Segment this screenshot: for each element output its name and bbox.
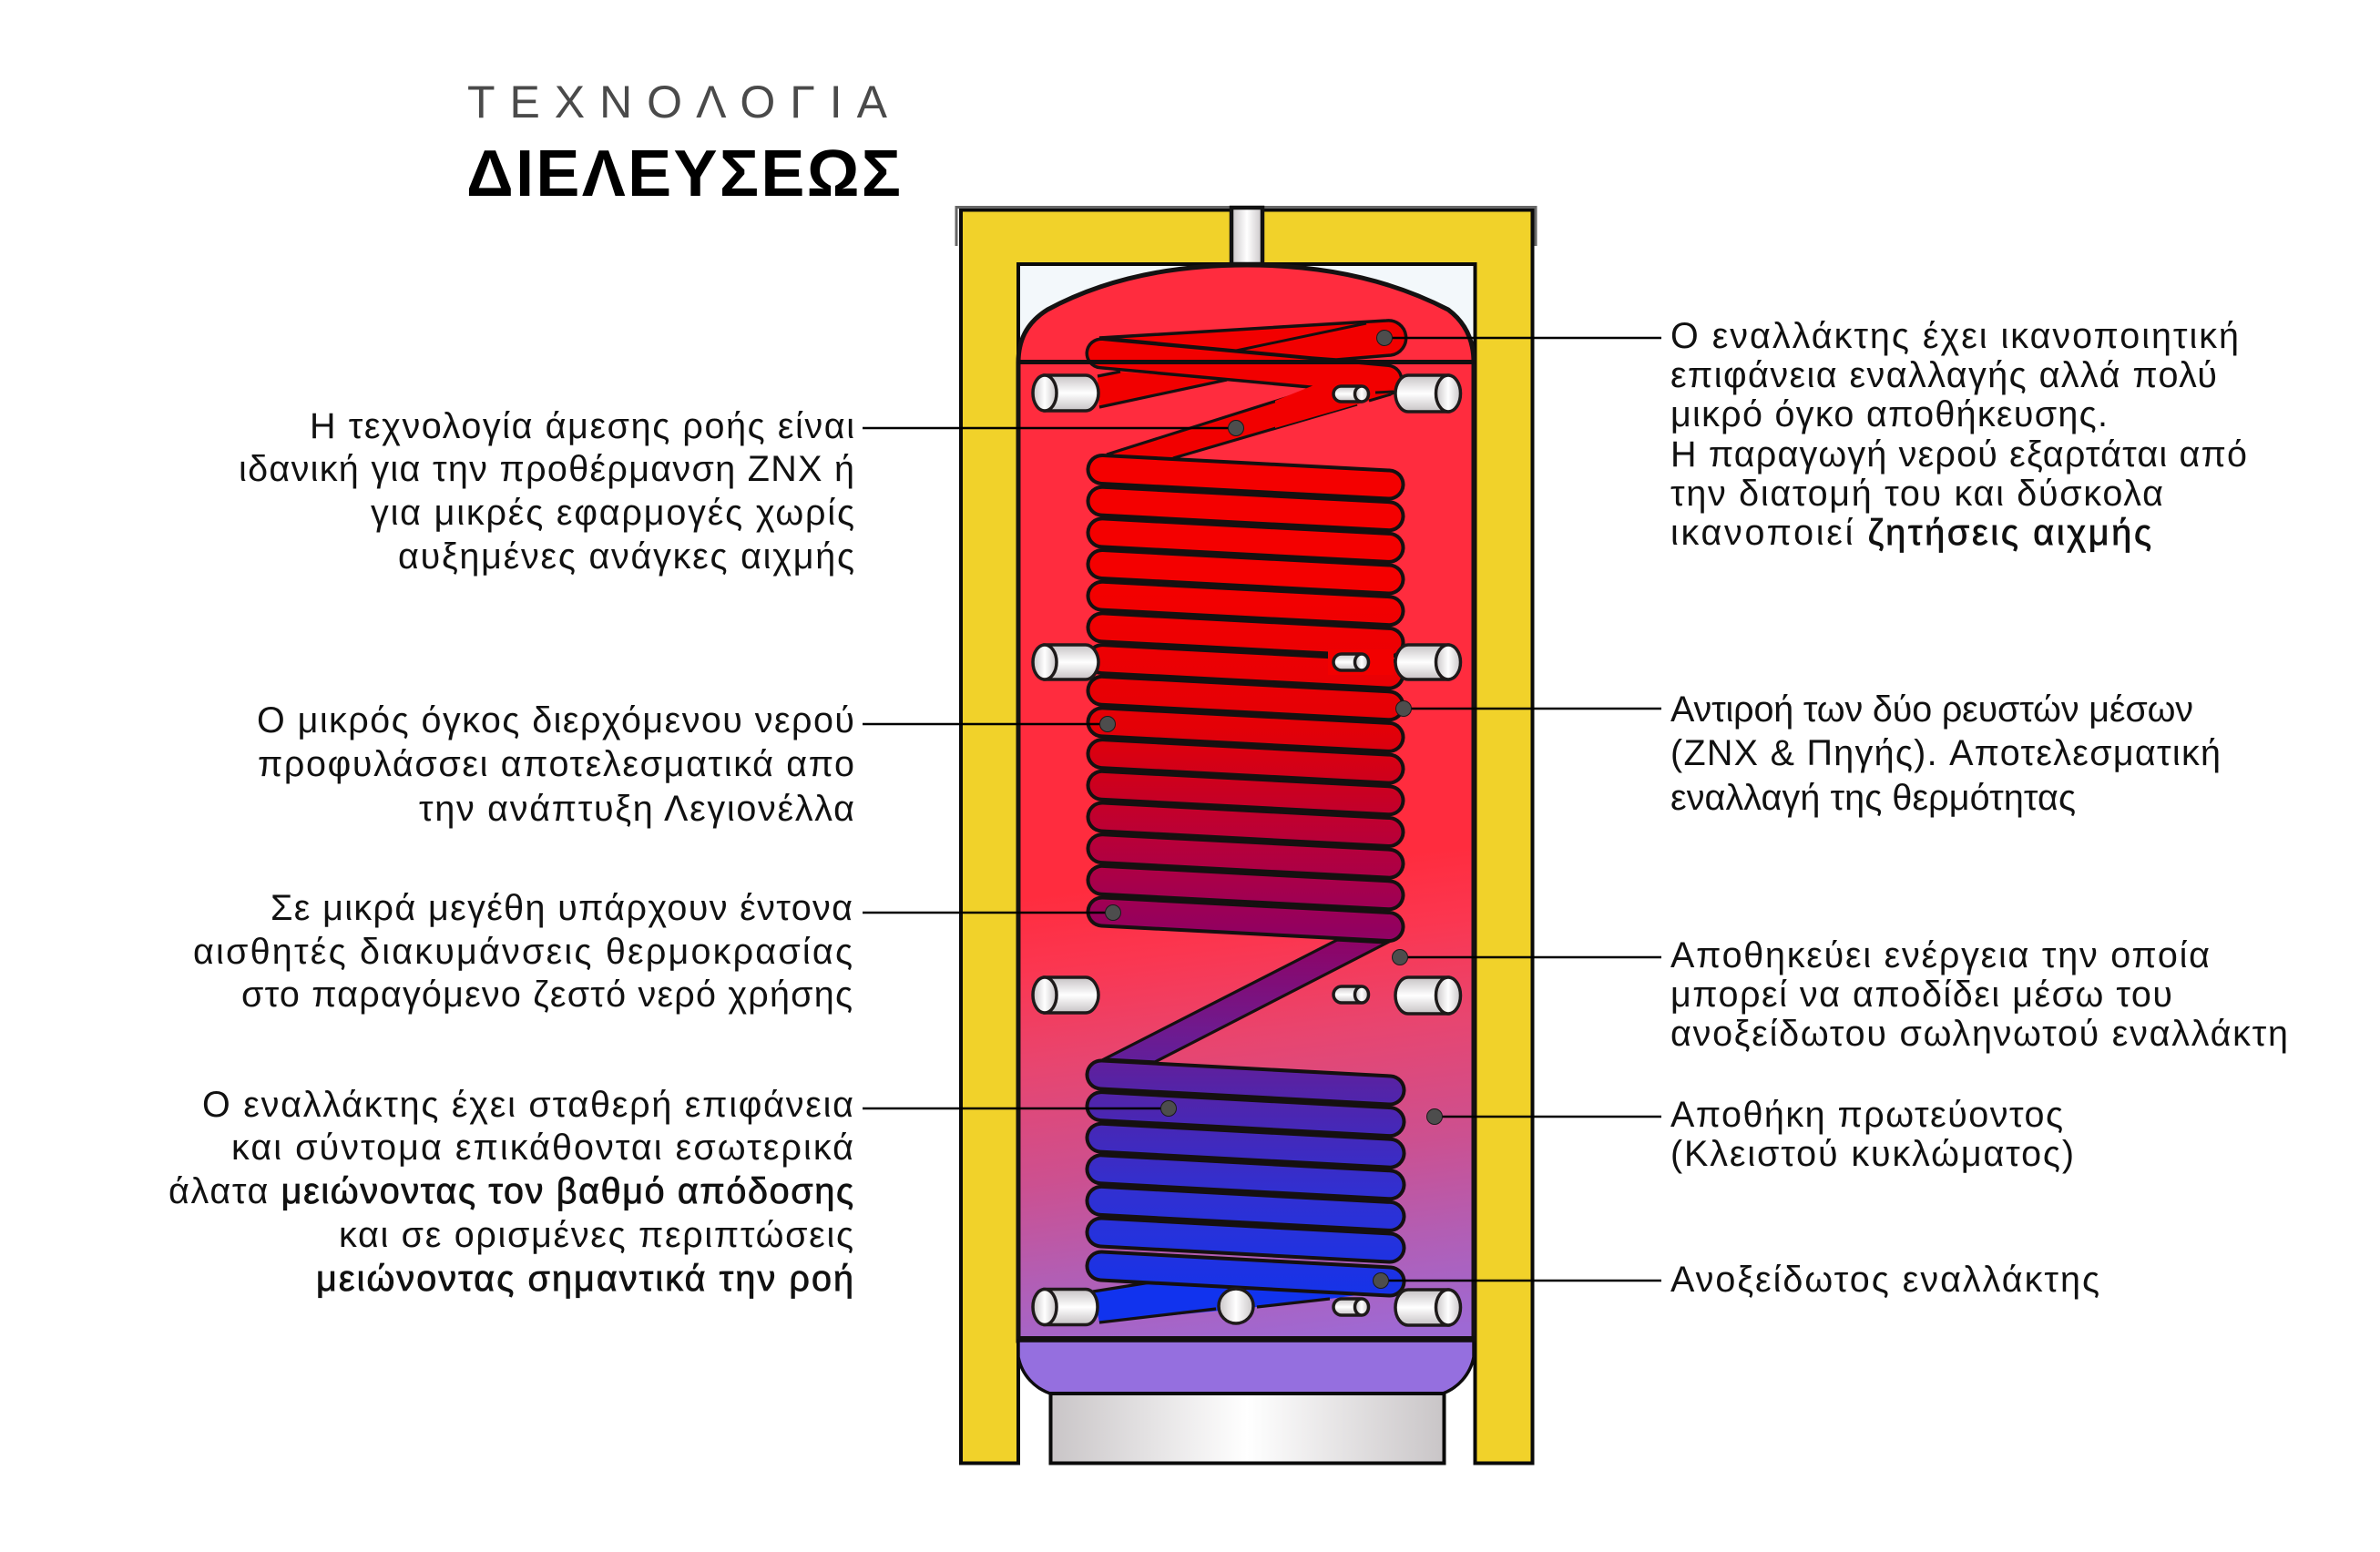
upper tank divider — [1018, 360, 1476, 364]
callout: legionella protection: προφυλάσσει αποτελεσματικά απο — [258, 744, 854, 784]
callout: primary storage: (Κλειστού κυκλώματος) — [1670, 1134, 2074, 1174]
callout: counter-flow: εναλλαγή της θερμότητας — [1670, 778, 2076, 818]
callout: counter-flow: Αντιροή των δύο ρευστών μέσων — [1670, 689, 2193, 730]
callout: energy storage: Αποθηκεύει ενέργεια την οποία — [1670, 935, 2210, 975]
small sensor fittings — [1333, 386, 1368, 1315]
top coil front turn — [1101, 353, 1387, 380]
callout: primary storage: Αποθήκη πρωτεύοντος — [1670, 1095, 2063, 1135]
inlet pipe outlines — [1093, 1282, 1330, 1322]
callout: fixed surface scaling: Ο εναλλάκτης έχει σταθερή επιφάνεια — [202, 1085, 853, 1125]
callout: temperature fluctuations: Σε μικρά μεγέθη υπάρχουν έντονα — [271, 888, 853, 928]
lower diagonal connector — [1104, 940, 1387, 1062]
callout: exchanger surface and peak demand: την διατομή του και δύσκολα — [1670, 474, 2163, 514]
tank body — [1018, 265, 1474, 1341]
right connection cylinders — [1395, 375, 1461, 1325]
bottom inlet valve — [1219, 1289, 1253, 1323]
callout: legionella protection — [257, 700, 1115, 829]
callout: temperature fluctuations: αισθητές διακυμάνσεις θερμοκρασίας — [193, 932, 853, 972]
callout: stainless exchanger — [1374, 1260, 2099, 1300]
callout: energy storage — [1392, 935, 2288, 1054]
callout: fixed surface scaling — [169, 1085, 1177, 1299]
callout: stainless exchanger: Ανοξείδωτος εναλλάκτης — [1670, 1260, 2099, 1300]
upper diagonal riser — [1107, 389, 1394, 458]
bottom inlet pipe — [1093, 1282, 1357, 1322]
lower heat exchanger coil — [1101, 1075, 1390, 1281]
callout: direct flow technology: ιδανική για την προθέρμανση ΖΝΧ ή — [239, 449, 854, 489]
riser joint lines — [1369, 392, 1394, 401]
callout: fixed surface scaling: μειώνοντας σημαντικά την ροή — [316, 1259, 853, 1299]
top coil back section — [1099, 321, 1406, 360]
upper heat exchanger coil — [1102, 470, 1389, 927]
callout: exchanger surface and peak demand: Ο εναλλάκτης έχει ικανοποιητική — [1670, 316, 2239, 356]
air gap under dome — [1020, 266, 1472, 361]
callout: exchanger surface and peak demand: μικρό όγκο αποθήκευσης. — [1670, 394, 2108, 434]
callout: exchanger surface and peak demand: επιφάνεια εναλλαγής αλλά πολύ — [1670, 355, 2217, 395]
tank bottom section — [1018, 1341, 1474, 1394]
callout: exchanger surface and peak demand — [1377, 316, 2247, 553]
boiler cross-section diagram — [956, 208, 1536, 1463]
tank lower divider — [1018, 1336, 1476, 1341]
insulation jacket — [961, 209, 1532, 1463]
base plinth — [1051, 1394, 1445, 1463]
callout: direct flow technology: Η τεχνολογία άμεσης ροής είναι — [310, 406, 854, 446]
callout: primary storage — [1426, 1095, 2074, 1174]
callout: fixed surface scaling: και σε ορισμένες περιπτώσεις — [339, 1215, 853, 1255]
callout: temperature fluctuations — [193, 888, 1120, 1015]
title — [466, 77, 901, 210]
callout: counter-flow — [1395, 689, 2221, 818]
top coil inner crossing line — [1236, 323, 1366, 351]
callout: legionella protection: Ο μικρός όγκος διερχόμενου νερού — [257, 700, 854, 740]
top cap outline — [956, 208, 1536, 246]
title: ΤΕΧΝΟΛΟΓΙΑ — [467, 77, 888, 128]
title: ΔΙΕΛΕΥΣΕΩΣ — [466, 138, 901, 210]
top outlet pipe — [1231, 208, 1262, 264]
left connection cylinders — [1033, 375, 1098, 1324]
lower-left wedge of top coil — [1098, 372, 1227, 407]
callout: exchanger surface and peak demand: ικανοποιεί ζητήσεις αιχμής — [1670, 513, 2151, 553]
callout: energy storage: ανοξείδωτου σωληνωτού εναλλάκτη — [1670, 1014, 2288, 1054]
callout: temperature fluctuations: στο παραγόμενο ζεστό νερό χρήσης — [241, 975, 853, 1015]
callout: legionella protection: την ανάπτυξη Λεγιονέλλα — [419, 789, 854, 829]
callout: direct flow technology: για μικρές εφαρμογές χωρίς — [371, 493, 854, 533]
callout: exchanger surface and peak demand: Η παραγωγή νερού εξαρτάται από — [1670, 434, 2247, 475]
red halo behind small fitting — [1328, 649, 1394, 675]
callout: counter-flow: (ZNX & Πηγής). Αποτελεσματική — [1670, 733, 2221, 773]
riser joint — [1275, 383, 1391, 428]
callout: fixed surface scaling: άλατα μειώνοντας τον βαθμό απόδοσης — [169, 1171, 853, 1211]
callout: direct flow technology: αυξημένες ανάγκες αιχμής — [398, 536, 854, 577]
callout: fixed surface scaling: και σύντομα επικάθονται εσωτερικά — [231, 1128, 853, 1168]
callout: energy storage: μπορεί να αποδίδει μέσω του — [1670, 975, 2172, 1015]
callout: direct flow technology — [239, 406, 1244, 577]
